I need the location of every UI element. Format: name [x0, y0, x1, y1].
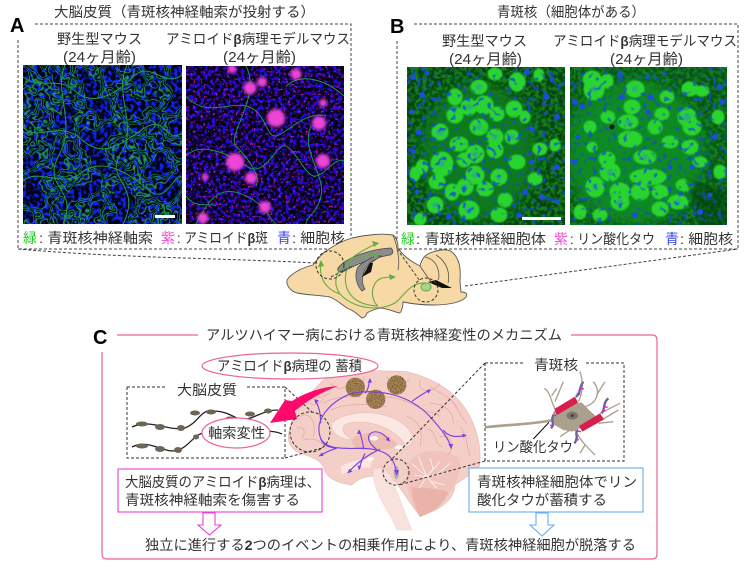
pink statement box — [118, 469, 322, 512]
axon lower — [132, 431, 282, 451]
legend text: phospho tau: : リン酸化タウ — [570, 231, 655, 247]
axon upper — [132, 410, 278, 429]
locus coeruleus grey spot — [394, 466, 399, 479]
legend text: nuclei: : 細胞核 — [680, 231, 733, 247]
purple arrowheads — [314, 378, 467, 476]
brain outline — [287, 234, 467, 318]
cerebellum — [407, 451, 460, 517]
dashed circle locus coeruleus — [383, 459, 409, 485]
panel C label: C — [93, 327, 107, 349]
legend text: amyloid: : アミロイドβ斑 — [177, 230, 268, 246]
conclusion: 独立に進行する2つのイベントの相乗作用により、青斑核神経細胞が脱落する — [145, 537, 636, 553]
column age: amyloid model: (24ヶ月齢) — [223, 49, 296, 66]
column title: wild type: 野生型マウス — [57, 31, 142, 47]
panel B dashed frame — [397, 24, 738, 249]
cortex inset dashed box — [127, 387, 285, 458]
dashed circle LC — [414, 278, 438, 302]
red arrow from plaque to axons — [270, 386, 338, 423]
legend colour: purple: 紫 — [161, 230, 175, 246]
tau label: リン酸化タウ — [493, 439, 573, 455]
callout text: 軸索変性 — [208, 425, 265, 441]
legend colour: green: 緑 — [23, 230, 37, 246]
LC inset dashed box — [485, 363, 624, 461]
neuron nucleus — [567, 412, 578, 420]
legend colour: green: 緑 — [401, 231, 415, 247]
lower structures — [340, 458, 373, 475]
dashed circle cortex region — [290, 412, 330, 452]
column age: amyloid model: (24ヶ月齢) — [610, 51, 683, 68]
neuron dendrite branches — [544, 372, 620, 455]
mouse brain diagram — [18, 234, 738, 318]
neuron illustration — [485, 372, 620, 455]
LC inset title: 青斑核 — [534, 357, 578, 373]
column title: wild type: 野生型マウス — [442, 33, 527, 49]
dashed circle cortex — [316, 251, 344, 279]
panel C: mechanism — [93, 327, 657, 559]
red tau fibres — [554, 397, 604, 432]
panel A label: A — [10, 15, 24, 37]
micrograph: wild type cortex axons — [23, 65, 182, 224]
axon degeneration callout — [202, 418, 270, 448]
blue hollow arrow — [530, 513, 554, 536]
cerebrum outline — [288, 371, 480, 517]
ventricle spots — [367, 436, 403, 461]
fold lines — [368, 235, 449, 283]
line 2: 酸化タウが蓄積する — [477, 492, 607, 508]
panel B heading: 青斑核（細胞体がある） — [497, 4, 645, 20]
micrograph: amyloid model cortex plaques — [186, 66, 344, 224]
callout ellipse — [202, 418, 270, 448]
hippocampus lower — [356, 256, 382, 291]
blue statement box — [469, 468, 643, 512]
green axon projections — [320, 243, 426, 308]
dashed zoom lines to cortex — [285, 387, 322, 458]
degenerating axons — [132, 408, 282, 453]
neuron axon — [485, 420, 553, 427]
panel A dashed frame — [18, 24, 351, 249]
neuron nucleolus — [571, 414, 574, 417]
dashed leader lines — [18, 249, 738, 286]
micrograph: wild type locus coeruleus — [407, 67, 565, 225]
thalamus — [352, 433, 397, 450]
legend text: nuclei: : 細胞核 — [292, 230, 345, 246]
column age: wild type: (24ヶ月齢) — [449, 51, 522, 68]
amyloid plaques — [346, 375, 406, 409]
corpus callosum — [331, 413, 413, 447]
column age: wild type: (24ヶ月齢) — [63, 49, 136, 66]
column title: amyloid model: アミロイドβ病理モデルマウス — [553, 33, 737, 49]
pink hollow arrow — [198, 513, 221, 535]
box — [469, 468, 643, 512]
phospho tau tangles — [551, 382, 608, 443]
line 2: 青斑核神経軸索を傷害する — [125, 492, 300, 508]
green arrowheads — [318, 241, 396, 280]
legend text: cell bodies: : 青斑核神経細胞体 — [416, 231, 546, 247]
panel A: cerebral cortex — [10, 4, 351, 249]
cerebellum lower lobe — [412, 487, 448, 517]
phospho tau marks — [550, 388, 608, 440]
panel B label: B — [390, 16, 404, 38]
neuron body — [552, 402, 600, 432]
callout ellipse — [202, 353, 378, 379]
legend colour: purple: 紫 — [554, 231, 568, 247]
scale bar — [155, 215, 175, 218]
locus coeruleus spot — [421, 283, 431, 291]
scale bar — [522, 217, 561, 220]
legend colour: blue: 青 — [277, 230, 291, 246]
box — [118, 469, 322, 512]
line 1: 大脳皮質のアミロイドβ病理は、 — [125, 474, 320, 490]
hippocampus upper — [338, 248, 393, 272]
ventricle black — [362, 263, 452, 288]
legend text: axons: : 青斑核神経軸索 — [39, 230, 153, 246]
callout text: アミロイドβ病理の 蓄積 — [217, 358, 362, 374]
cortical folds — [297, 377, 470, 457]
cortex inset title: 大脳皮質 — [177, 382, 237, 398]
axon varicosities — [136, 408, 272, 453]
panel B: locus coeruleus — [390, 4, 738, 249]
panel A heading: 大脳皮質（青斑核神経軸索が投射する） — [54, 4, 315, 20]
dashed zoom lines to LC — [392, 363, 485, 485]
micrograph: amyloid model locus coeruleus — [570, 67, 727, 225]
panel C heading: アルツハイマー病における青斑核神経変性のメカニズム — [206, 327, 562, 343]
cerebellum white matter — [412, 457, 450, 488]
panel C frame — [102, 335, 657, 559]
column title: amyloid model: アミロイドβ病理モデルマウス — [166, 31, 350, 47]
line 1: 青斑核神経細胞体でリン — [477, 474, 637, 490]
legend colour: blue: 青 — [665, 231, 679, 247]
human brain illustration — [288, 371, 480, 530]
brainstem — [373, 468, 412, 530]
purple axon arrows — [315, 382, 466, 475]
legend: panel A — [20, 231, 348, 248]
amyloid accumulation callout — [202, 353, 378, 379]
tau pointer line — [533, 422, 549, 439]
legend: panel B — [399, 232, 736, 248]
